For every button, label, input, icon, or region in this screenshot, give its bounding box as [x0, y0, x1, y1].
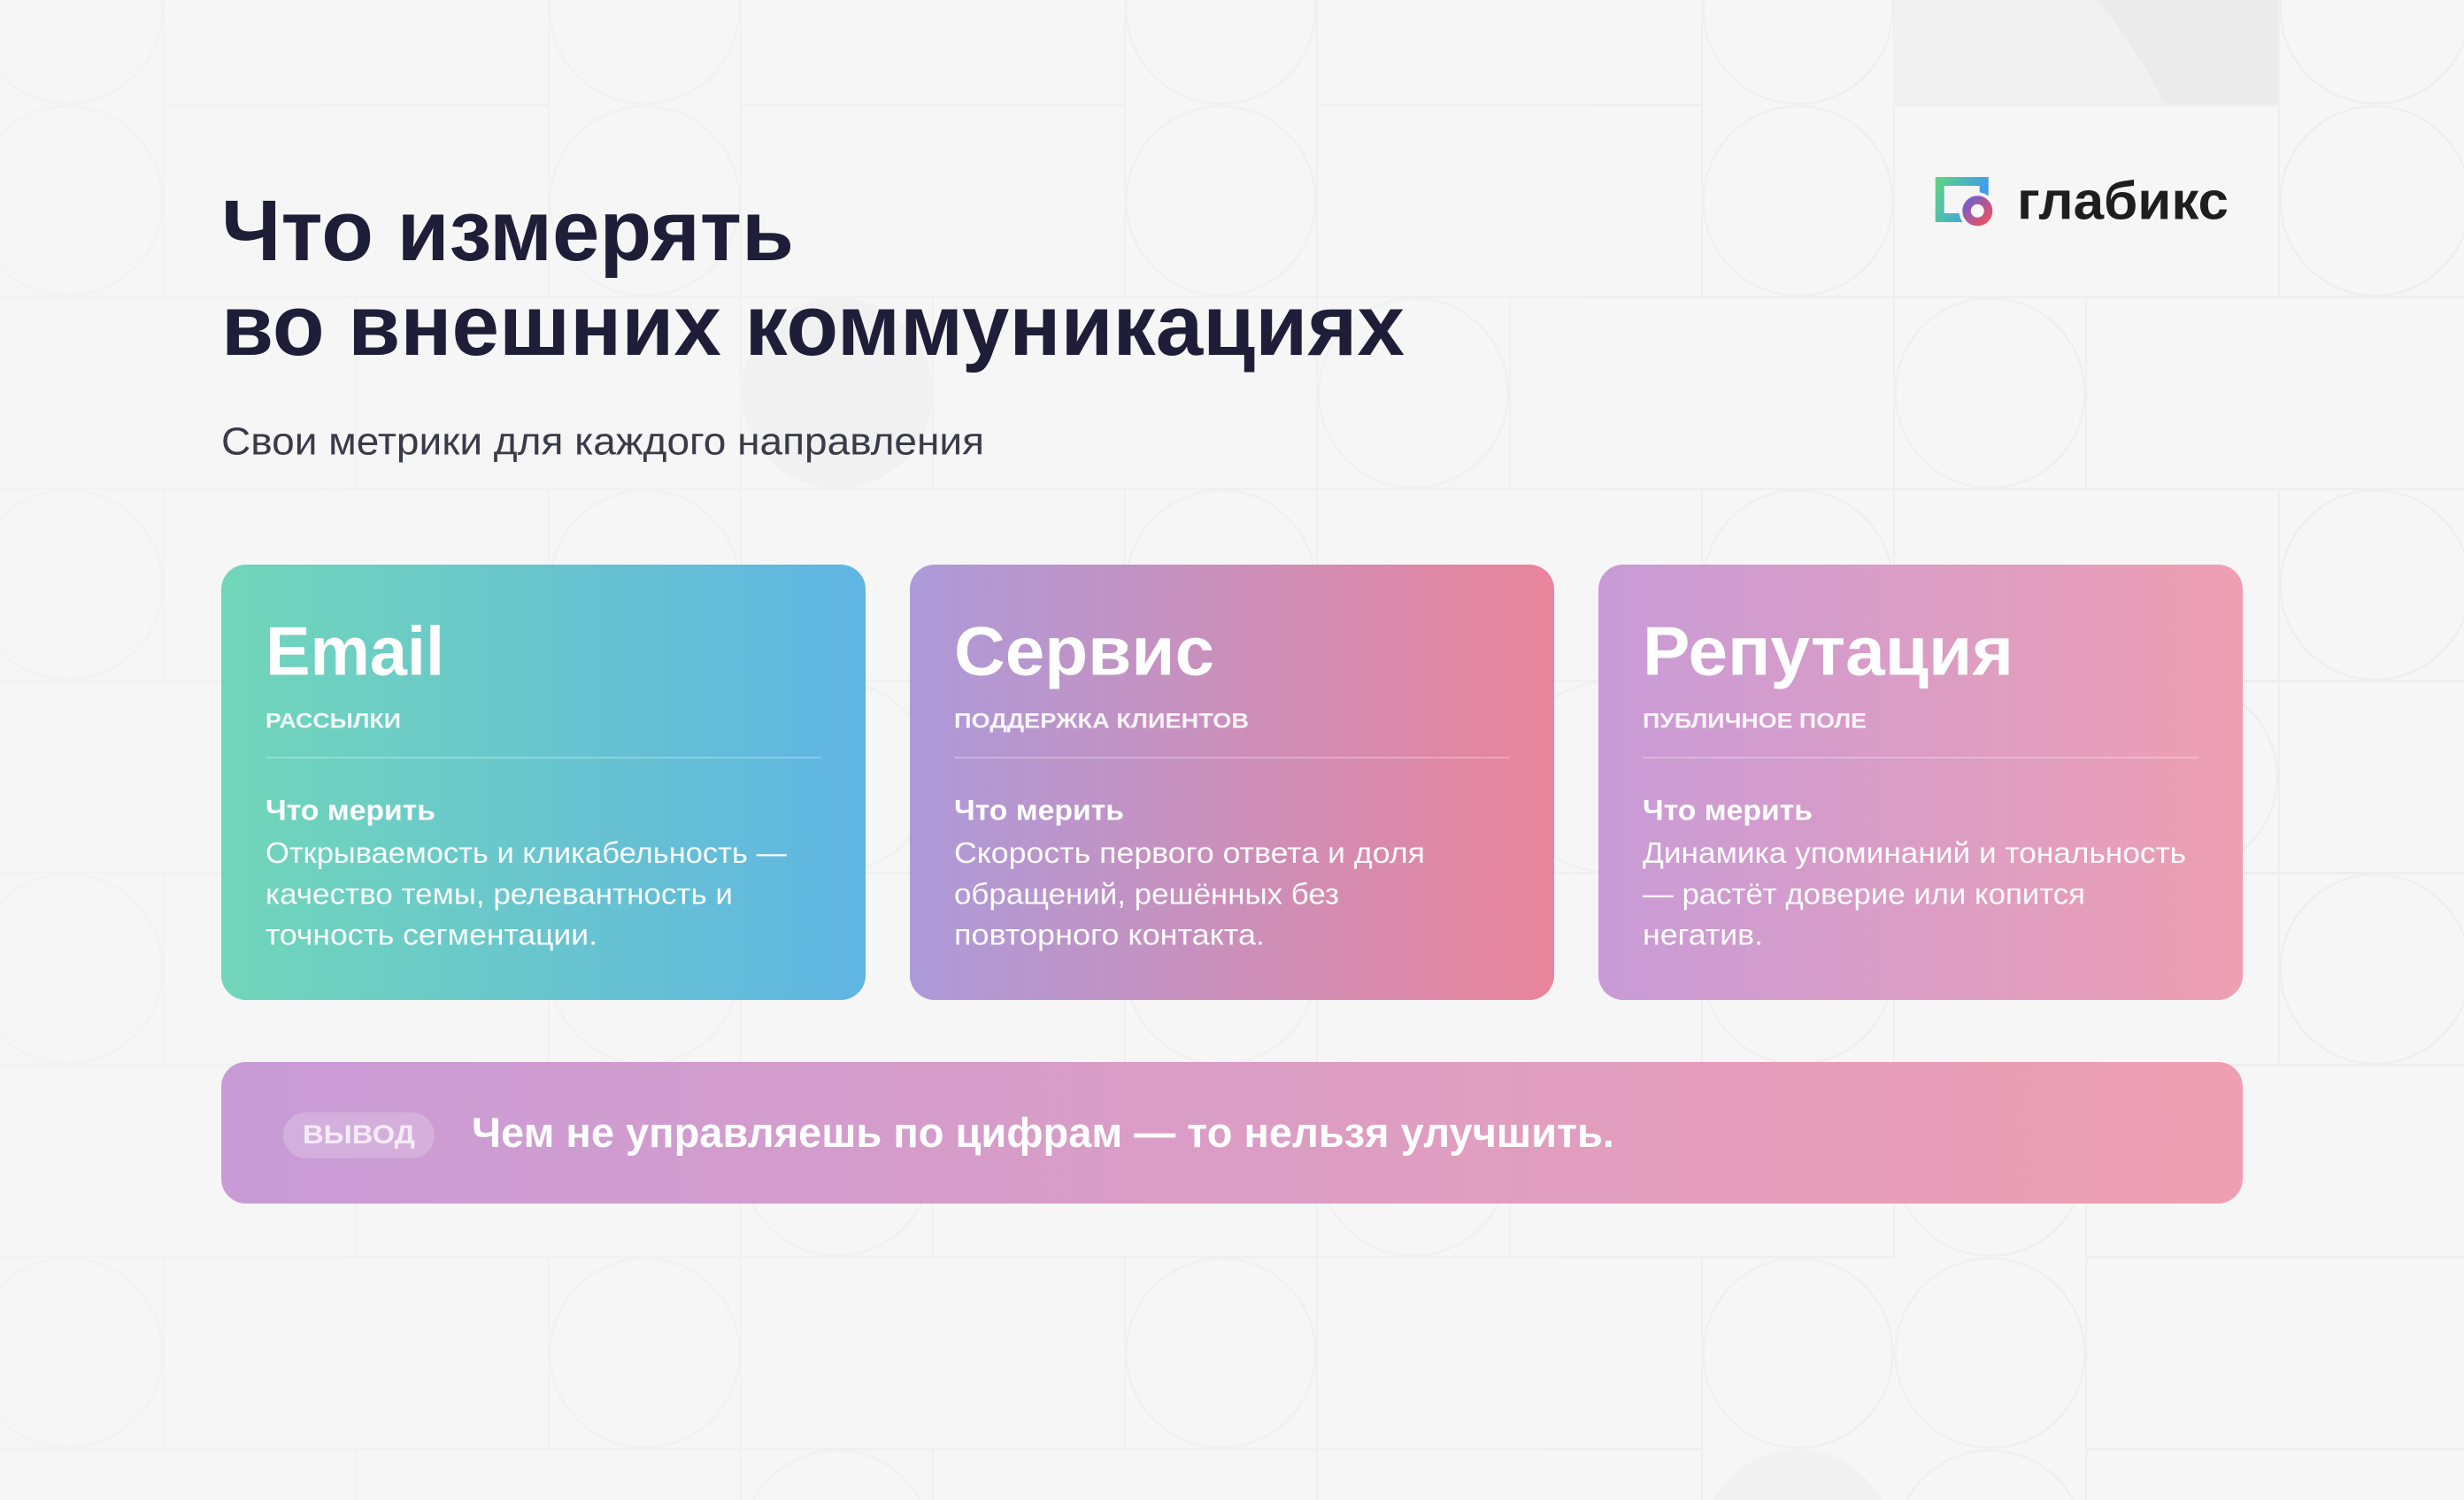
card subheading: РАССЫЛКИ	[266, 709, 401, 733]
panel: Репутация	[1598, 565, 2243, 1000]
card heading: Репутация	[1643, 612, 2014, 690]
panel: Сервис	[910, 565, 1554, 1000]
title: во внешних коммуникациях	[221, 277, 1405, 373]
panel: conclusion bar	[221, 1062, 2243, 1204]
card body text	[954, 836, 1425, 950]
logo	[1936, 171, 2229, 230]
conclusion tag	[283, 1112, 435, 1158]
card body text: — растёт доверие или копится	[1643, 878, 2085, 910]
card body text: негатив.	[1643, 919, 1763, 950]
card body text	[1643, 836, 2186, 950]
card subheading: ПОДДЕРЖКА КЛИЕНТОВ	[954, 709, 1249, 733]
card body text: Динамика упоминаний и тональность	[1643, 836, 2186, 869]
card body text: обращений, решённых без	[954, 878, 1339, 910]
card heading: Email	[266, 612, 444, 690]
card body text: повторного контакта.	[954, 919, 1265, 950]
conclusion tag: ВЫВОД	[303, 1120, 415, 1150]
subtitle: Свои метрики для каждого направления	[221, 419, 984, 464]
title	[221, 182, 1405, 373]
title: Что измерять	[221, 182, 794, 279]
card label: Что мерить	[266, 795, 435, 827]
card heading: Сервис	[954, 612, 1214, 690]
panel: Email	[221, 565, 866, 1000]
card label: Что мерить	[1643, 795, 1813, 827]
card body text: Открываемость и кликабельность —	[266, 836, 787, 869]
card body text	[266, 836, 787, 950]
card body text: качество темы, релевантность и	[266, 878, 733, 910]
card subheading: ПУБЛИЧНОЕ ПОЛЕ	[1643, 709, 1867, 733]
card body text: Скорость первого ответа и доля	[954, 836, 1425, 869]
logo wordmark: глабикс	[2017, 171, 2229, 230]
conclusion text: Чем не управляешь по цифрам — то нельзя улучшить.	[472, 1109, 1614, 1156]
card label: Что мерить	[954, 795, 1124, 827]
card body text: точность сегментации.	[266, 919, 597, 950]
icon: logo mark	[1936, 177, 1996, 229]
